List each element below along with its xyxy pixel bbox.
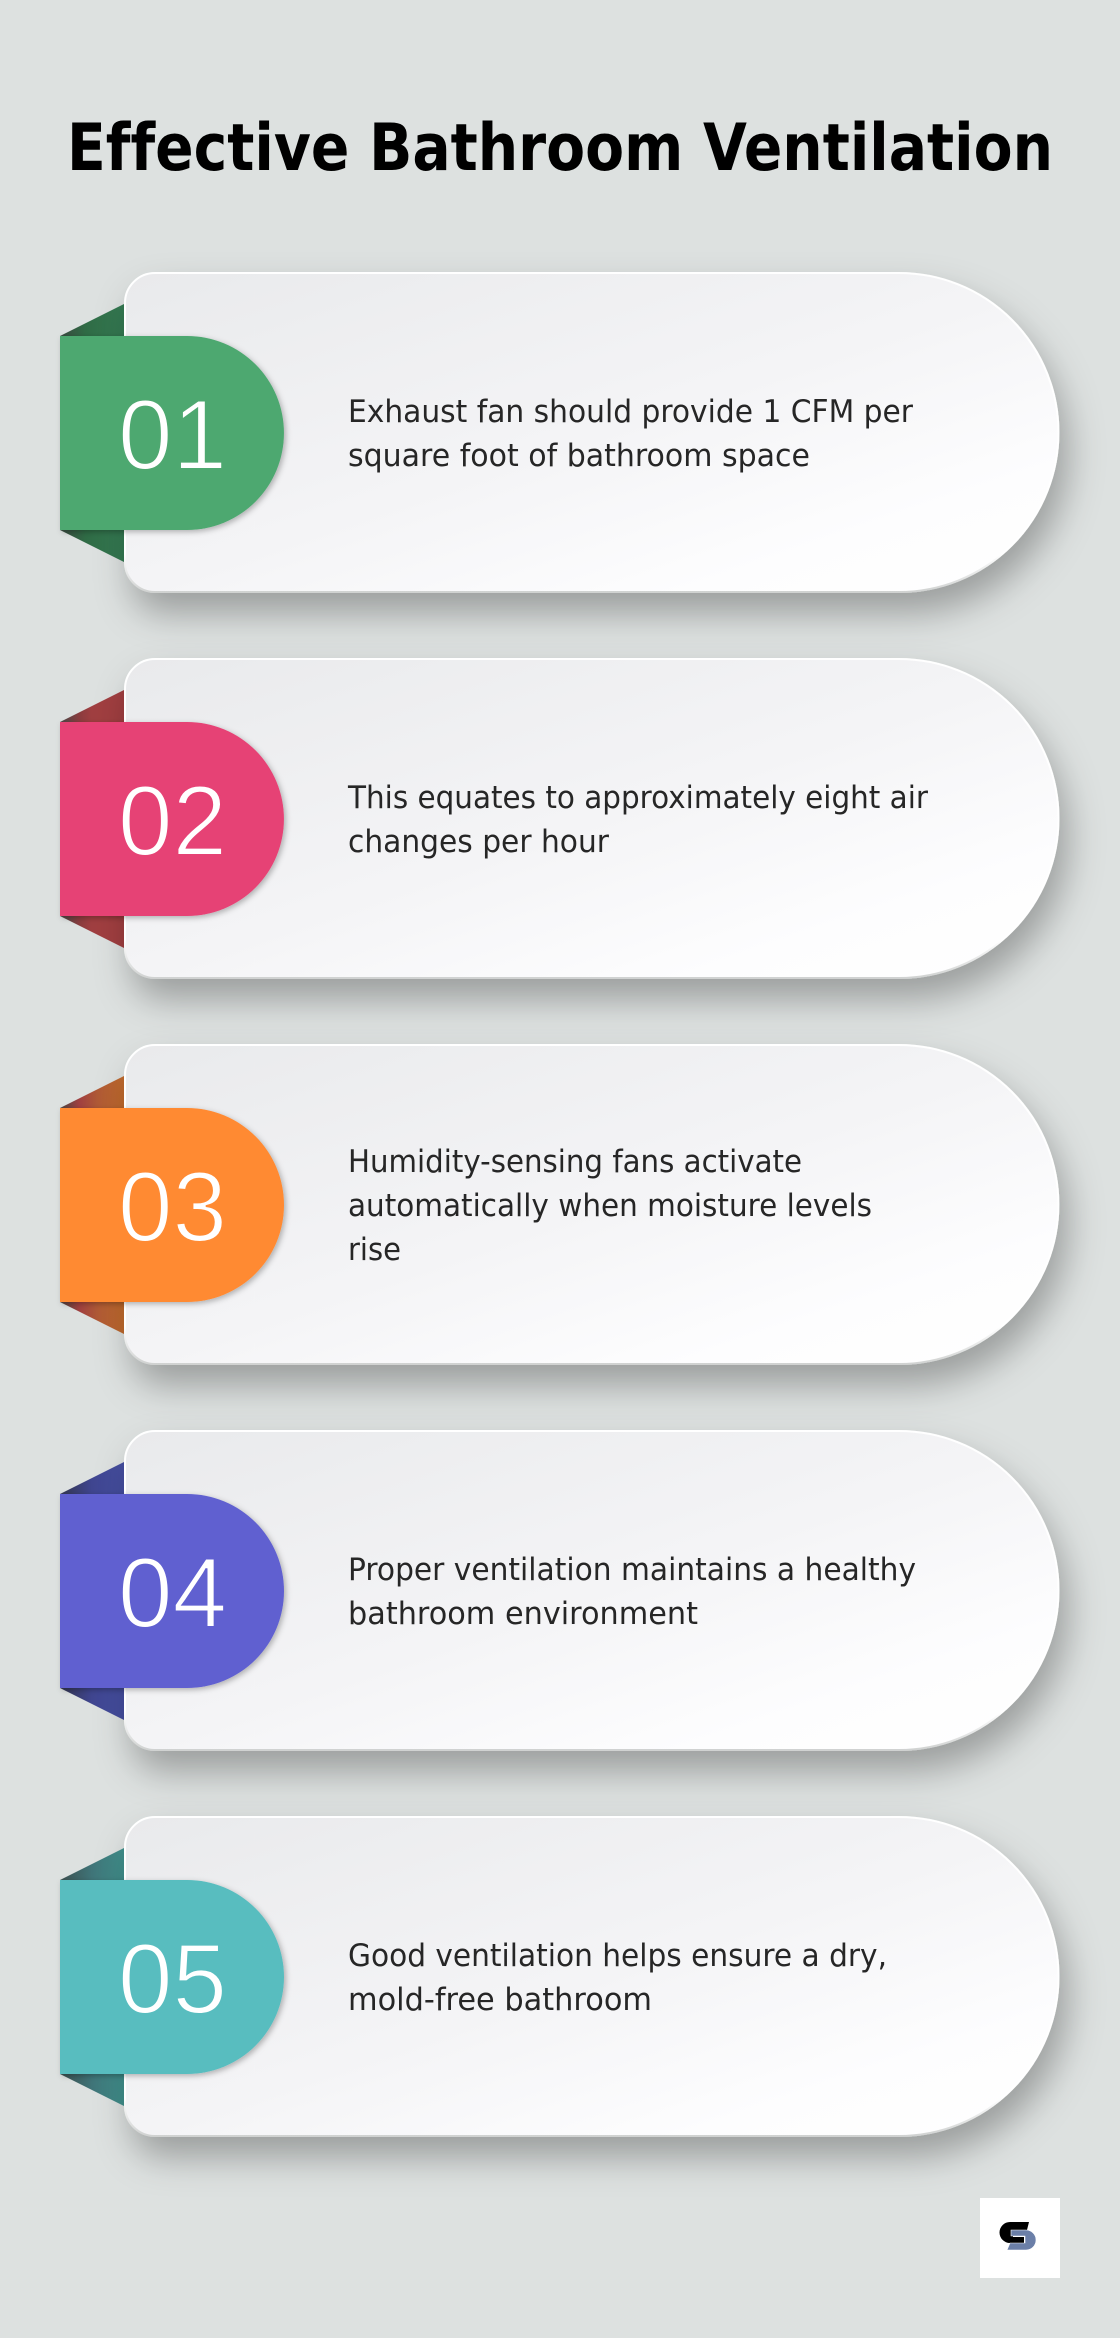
ribbon folds 02 xyxy=(60,690,124,948)
card 05 xyxy=(125,1817,1058,2136)
card 02 xyxy=(125,659,1058,978)
text 03: Humidity-sensing fans activate xyxy=(348,1144,802,1180)
tab 04 xyxy=(60,1494,284,1688)
panel: step 03 xyxy=(60,1045,1058,1364)
number 02: 02 xyxy=(118,765,227,876)
tab 05 xyxy=(60,1880,284,2074)
logo xyxy=(980,2198,1060,2278)
text 01: square foot of bathroom space xyxy=(348,438,810,474)
text 04: Proper ventilation maintains a healthy xyxy=(348,1552,916,1588)
number 01: 01 xyxy=(118,379,227,490)
number 03: 03 xyxy=(118,1151,227,1262)
card 04 xyxy=(125,1431,1058,1750)
text 05: Good ventilation helps ensure a dry, xyxy=(348,1938,887,1974)
panel: step 01 xyxy=(60,273,1058,592)
text 02: changes per hour xyxy=(348,824,609,860)
card 01 xyxy=(125,273,1058,592)
ribbon folds 03 xyxy=(60,1076,124,1334)
text 03: rise xyxy=(348,1232,401,1268)
card 03 xyxy=(125,1045,1058,1364)
ribbon folds 04 xyxy=(60,1462,124,1720)
text 03: automatically when moisture levels xyxy=(348,1188,872,1224)
ribbon folds 01 xyxy=(60,304,124,562)
text 02: This equates to approximately eight air xyxy=(347,780,928,816)
tab 03 xyxy=(60,1108,284,1302)
panel: step 02 xyxy=(60,659,1058,978)
number 05: 05 xyxy=(118,1923,227,2034)
text 01: Exhaust fan should provide 1 CFM per xyxy=(348,394,913,430)
number 04: 04 xyxy=(118,1537,227,1648)
text 04: bathroom environment xyxy=(348,1596,698,1632)
ribbon folds 05 xyxy=(60,1848,124,2106)
panel: step 04 xyxy=(60,1431,1058,1750)
panel: step 05 xyxy=(60,1817,1058,2136)
text 05: mold-free bathroom xyxy=(348,1982,652,2018)
tab 02 xyxy=(60,722,284,916)
tab 01 xyxy=(60,336,284,530)
